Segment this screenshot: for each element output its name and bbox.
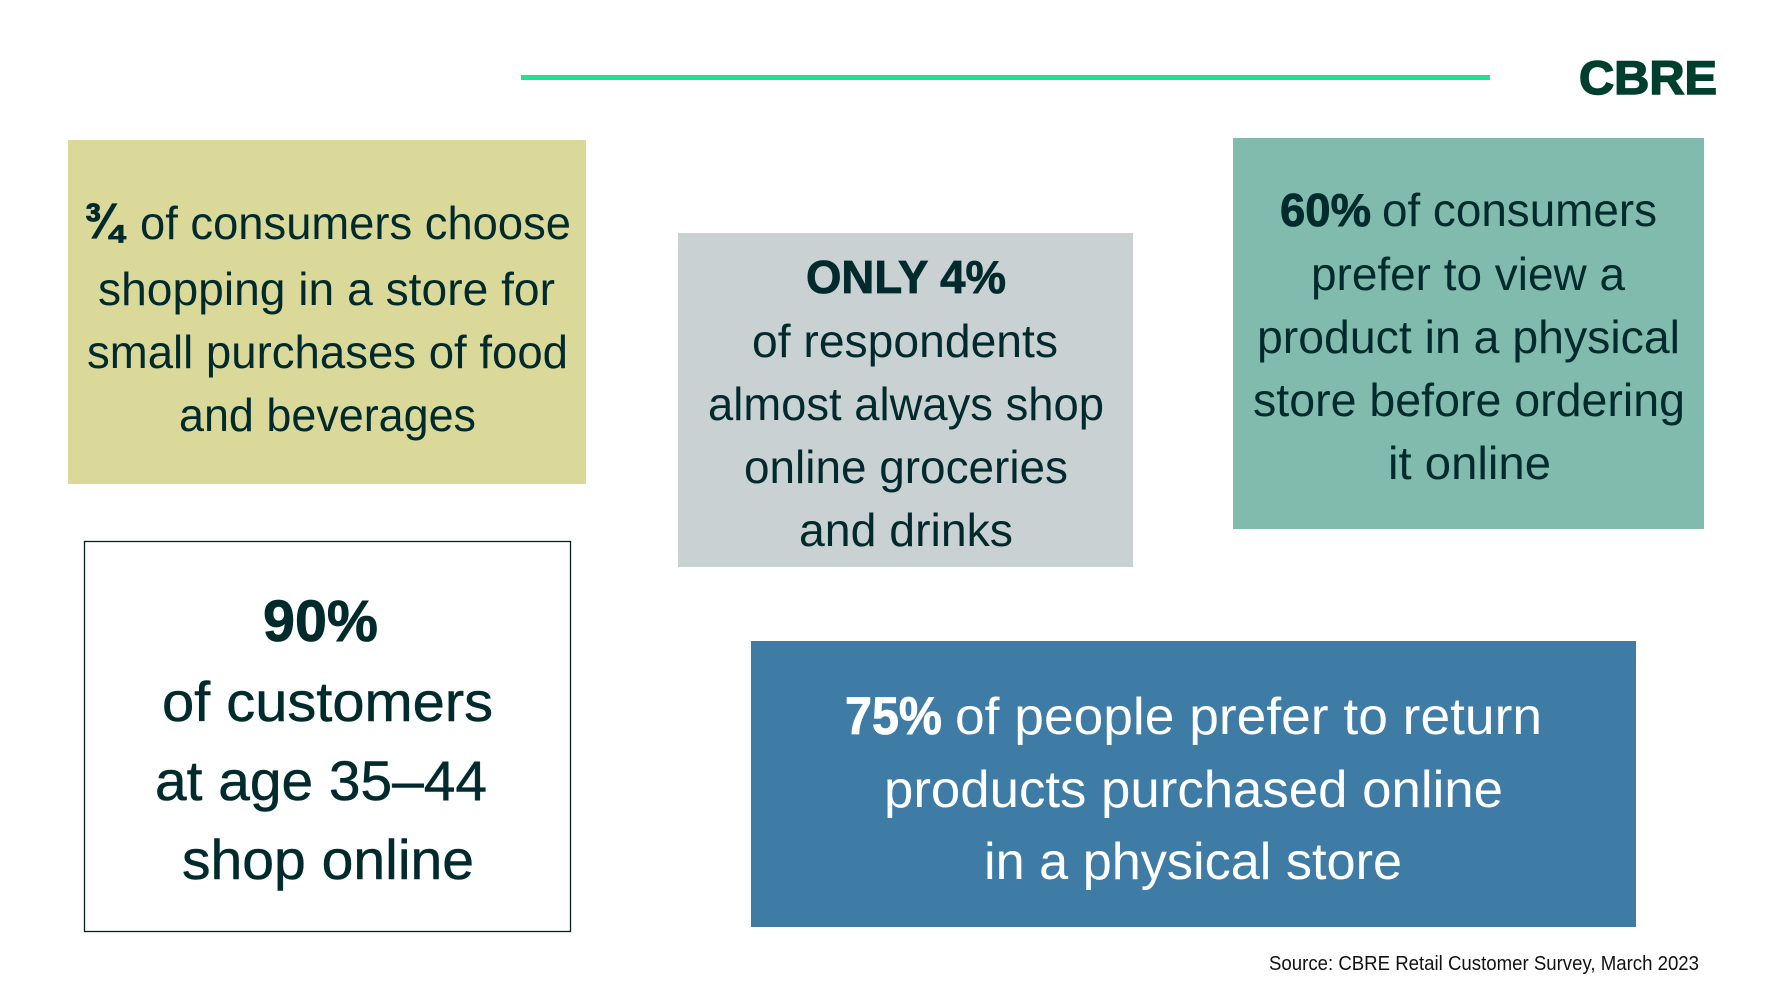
text: store shopping statement: and beverages xyxy=(179,389,476,441)
text: online groceries statement xyxy=(708,315,1104,556)
text: online groceries statement: of respondents xyxy=(752,315,1058,367)
panel background: teal xyxy=(1233,138,1704,529)
panel: only 4 percent of respondents xyxy=(678,233,1133,567)
panel: three quarters of consumers xyxy=(68,140,586,484)
text: returns statement xyxy=(884,688,1542,891)
text: view in physical store statement: it online xyxy=(1388,437,1551,489)
text: store shopping statement: shopping in a store for xyxy=(98,263,555,315)
text: age 35-44 statement: shop online xyxy=(182,828,474,891)
text: online groceries statement: and drinks xyxy=(799,504,1013,556)
CBRE logo: CBRE xyxy=(1579,51,1717,104)
statistic: only 4%: ONLY 4% xyxy=(806,251,1006,303)
text: age 35-44 statement: at age 35–44 xyxy=(155,749,487,812)
panel background: blue xyxy=(751,641,1636,927)
text: returns statement: products purchased online xyxy=(884,761,1503,819)
text: returns statement: in a physical store xyxy=(984,833,1402,891)
text: online groceries statement: online groceries xyxy=(744,441,1068,493)
text: view in physical store statement: of consumers xyxy=(1382,184,1657,236)
text: age 35-44 statement: of customers xyxy=(162,670,493,733)
text: online groceries statement: almost always shop xyxy=(708,378,1104,430)
panel: 75 percent of people xyxy=(751,641,1636,927)
source note: Source: CBRE Retail Customer Survey, March 2023 xyxy=(1269,953,1699,975)
text: view in physical store statement: store before ordering xyxy=(1253,374,1685,426)
statistic: three quarters: ¾ xyxy=(84,193,127,249)
text: view in physical store statement: prefer to view a xyxy=(1311,248,1625,300)
text: store shopping statement: small purchases of food xyxy=(87,326,568,378)
text: age 35-44 statement xyxy=(155,670,493,891)
text: store shopping statement xyxy=(87,197,571,441)
text: store shopping statement: of consumers choose xyxy=(140,197,571,249)
panel background: khaki xyxy=(68,140,586,484)
statistic: 90%: 90% xyxy=(263,589,378,654)
panel background: grey xyxy=(678,233,1133,567)
statistic: 60%: 60% xyxy=(1280,184,1371,236)
panel: 90 percent of customers xyxy=(84,542,570,932)
statistic: 75%: 75% xyxy=(845,687,942,746)
panel: 60 percent of consumers xyxy=(1233,138,1704,529)
green header line xyxy=(521,75,1490,80)
text: view in physical store statement xyxy=(1253,184,1685,489)
text: returns statement: of people prefer to return xyxy=(955,688,1542,746)
panel outline xyxy=(84,542,570,932)
text: view in physical store statement: product in a physical xyxy=(1257,311,1680,363)
